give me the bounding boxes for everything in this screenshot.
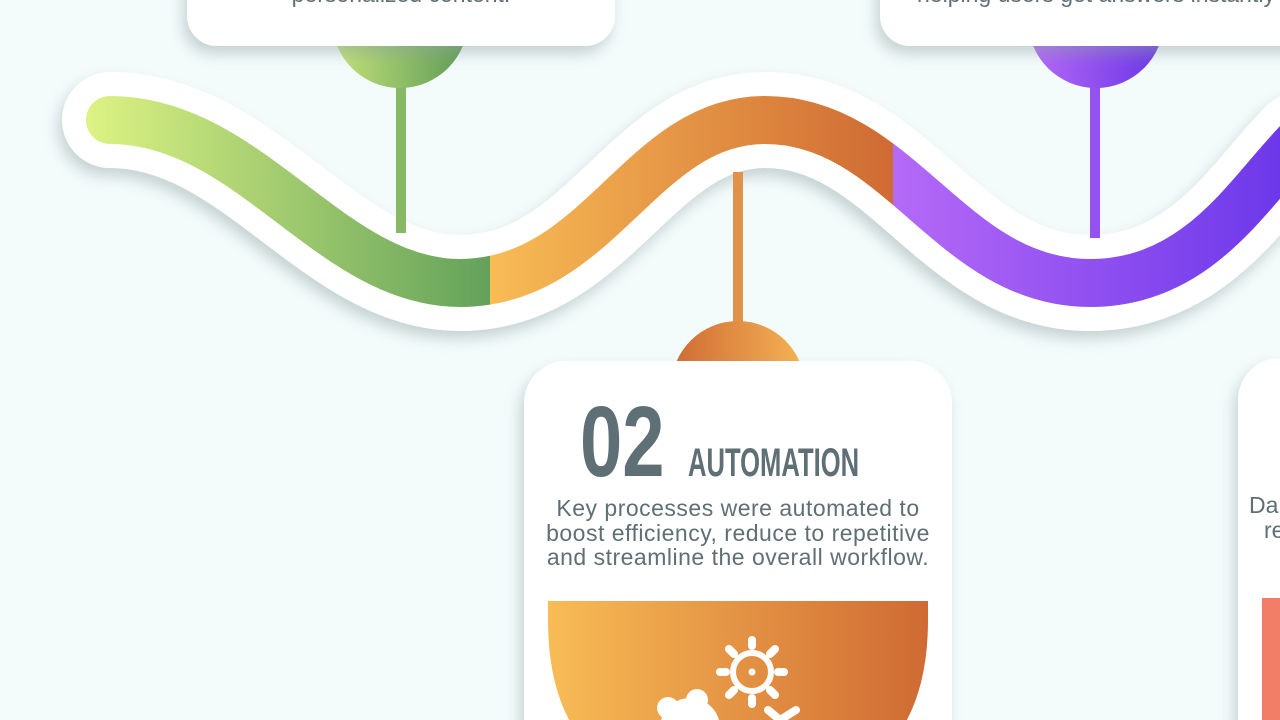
description: boost efficiency, reduce to repetitive	[546, 520, 930, 546]
card: step 03 (top-right)	[880, 0, 1280, 46]
icon panel	[548, 601, 928, 720]
icon: gears	[657, 640, 796, 720]
marker: orange	[671, 172, 805, 455]
card: step 04 (right, partial)	[1238, 358, 1280, 720]
description: and streamline the overall workflow.	[547, 544, 929, 570]
card: step 02 automation	[524, 361, 952, 720]
heading: AUTOMATION	[688, 441, 859, 486]
wave track	[110, 120, 1280, 283]
description: Key processes were automated to	[556, 495, 920, 521]
number: 02	[580, 386, 665, 497]
card: step 01 (top-left)	[187, 0, 615, 46]
marker: green	[332, 0, 468, 233]
card: step 04 (right, partial): Da	[1249, 492, 1279, 518]
marker: purple	[1028, 0, 1164, 238]
description	[546, 495, 930, 570]
